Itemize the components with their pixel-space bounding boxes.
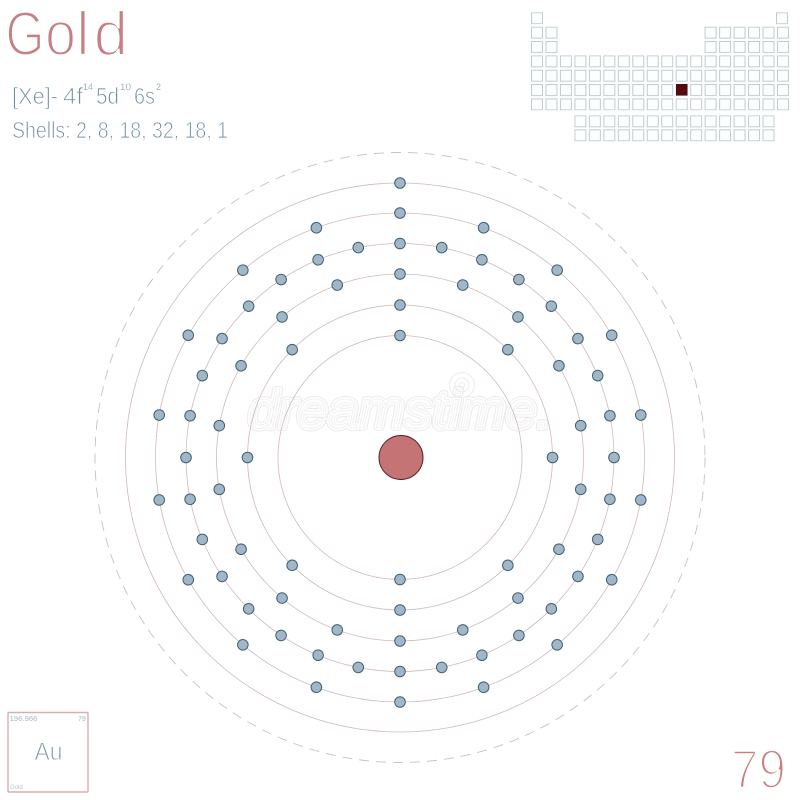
outer dashed boundary	[95, 152, 705, 762]
electron configuration	[12, 82, 161, 109]
electron configuration: 10	[120, 82, 131, 92]
title: Gold: d	[94, 0, 128, 69]
electron configuration: 5d	[96, 83, 119, 109]
title: Gold: l	[76, 0, 90, 69]
watermark: dreamstime.	[248, 380, 552, 440]
shell 5 electrons: 18	[153, 208, 647, 707]
shell 2 electrons: 8	[242, 300, 558, 615]
title: Gold: o	[45, 0, 76, 69]
atomic weight: 196.966	[10, 716, 38, 723]
nucleus	[379, 436, 423, 480]
shell 6 electron: 1	[395, 178, 405, 188]
symbol: Au	[34, 738, 62, 766]
shells list: Shells: 2, 8, 18, 32, 18, 1	[12, 117, 228, 143]
shell 3 electrons: 18	[213, 269, 587, 646]
atomic number small: 79	[78, 716, 86, 723]
atomic number: 79	[731, 738, 786, 800]
watermark: dreamstime.	[248, 380, 552, 440]
title: Gold	[6, 0, 128, 69]
electron configuration: 6s	[134, 83, 155, 109]
shell 1 electrons: 2	[395, 330, 405, 585]
watermark: dreamstime.	[248, 380, 552, 440]
highlighted cell: gold	[676, 84, 688, 96]
electron configuration: 2	[156, 82, 161, 92]
element tile: Au	[8, 712, 88, 792]
title: Gold: G	[6, 0, 44, 69]
atom diagram	[95, 152, 705, 762]
orbit rings	[126, 183, 674, 732]
element name small: Gold	[10, 785, 23, 791]
electron configuration: 14	[83, 82, 93, 92]
shell 4 electrons: 32	[181, 238, 619, 677]
periodic table locator	[531, 12, 790, 141]
electron configuration: 4f	[63, 83, 84, 109]
electron configuration: [Xe]-	[12, 83, 58, 109]
